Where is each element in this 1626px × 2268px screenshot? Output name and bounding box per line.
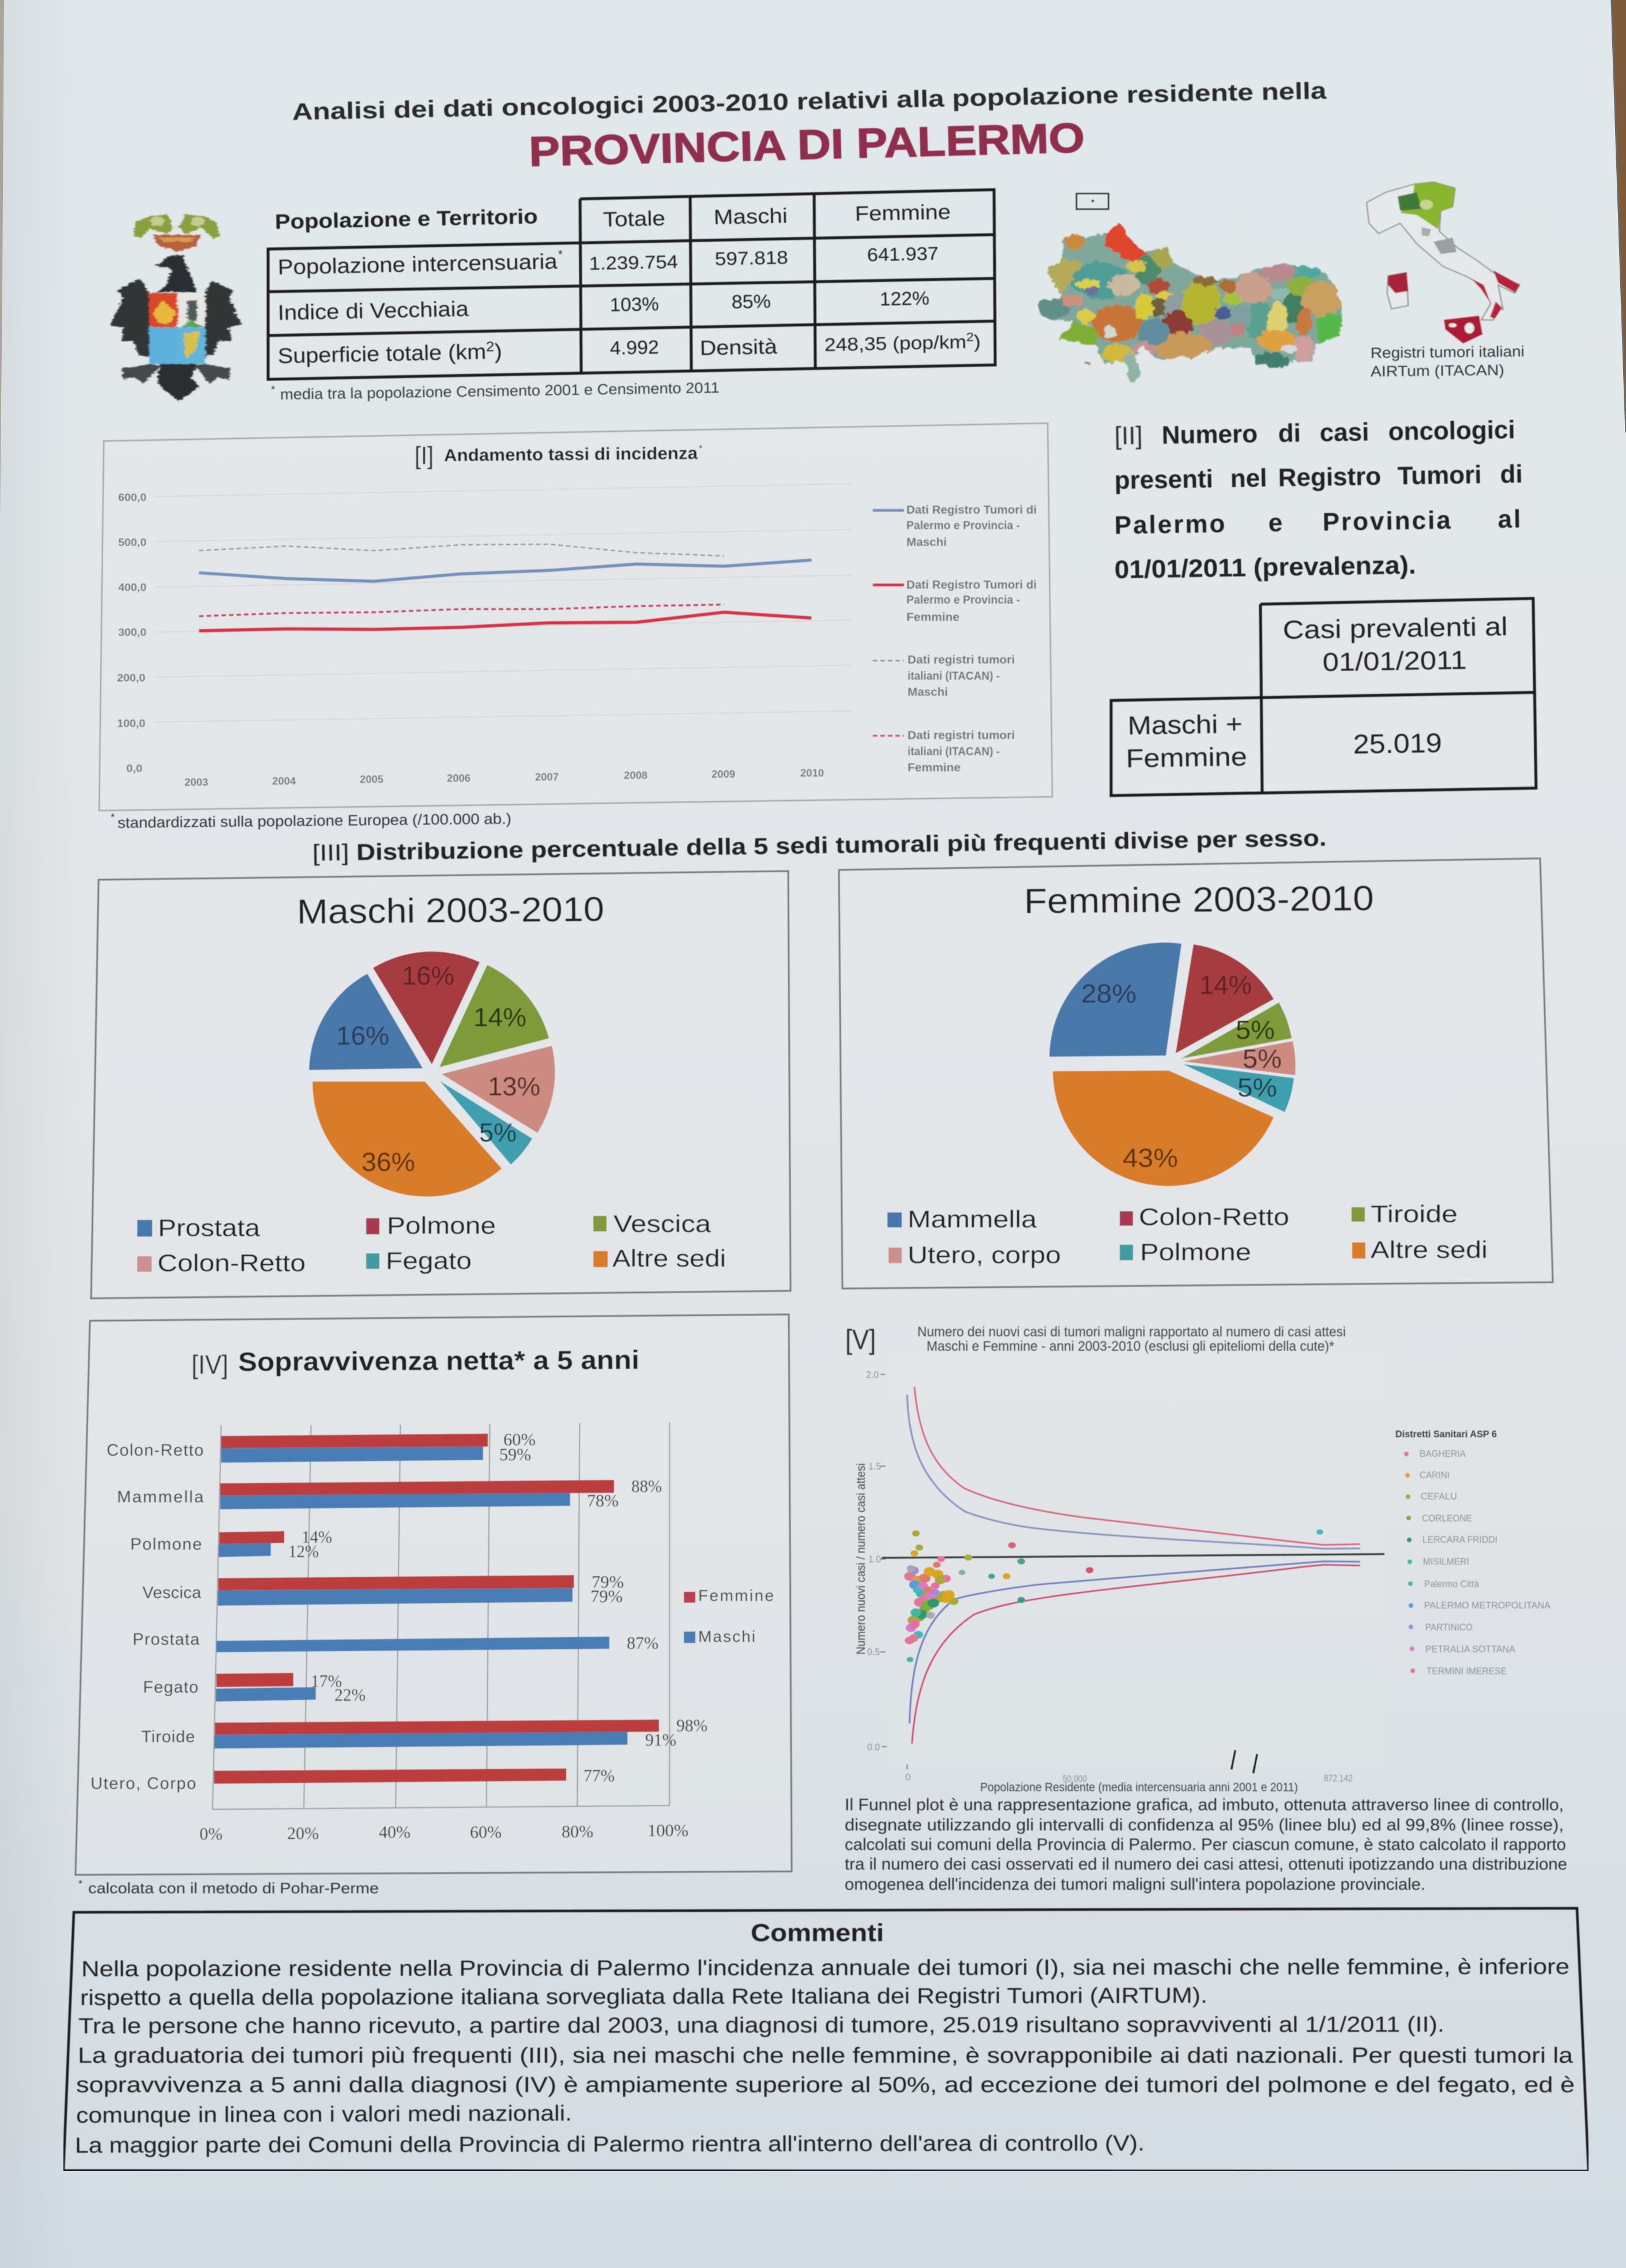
funnel legend: PETRALIA SOTTANA bbox=[1425, 1644, 1516, 1655]
chart IV legend: Femmine bbox=[698, 1587, 774, 1604]
chart I legend: Dati Registro Tumori di bbox=[906, 579, 1037, 592]
chart IV value labels: 22% bbox=[334, 1685, 366, 1705]
funnel legend: LERCARA FRIDDI bbox=[1422, 1534, 1497, 1545]
chart I y axis labels: 500,0 bbox=[118, 537, 146, 548]
header titles bbox=[292, 77, 1327, 175]
table values: Densità bbox=[699, 334, 778, 360]
panel II table: 25.019 bbox=[1353, 728, 1442, 759]
table values: 597.818 bbox=[714, 247, 788, 269]
chart I x axis labels: 2006 bbox=[447, 773, 471, 784]
chart I x axis labels: 2010 bbox=[800, 767, 824, 779]
funnel legend: CORLEONE bbox=[1422, 1513, 1472, 1524]
pie legend maschi: Fegato bbox=[386, 1247, 472, 1274]
chart I legend: Dati registri tumori bbox=[908, 654, 1015, 666]
chart IV x axis labels bbox=[200, 1820, 688, 1844]
chart I legend: Maschi bbox=[906, 536, 947, 549]
pie legend maschi: Polmone bbox=[387, 1212, 496, 1239]
funnel explanation text: disegnate utilizzando gli intervalli di confidenza al 95% (linee blu) ed al 99,8% (linee rosse), bbox=[845, 1816, 1564, 1834]
label: registri tumori italiani: Registri tumori italiani bbox=[1371, 342, 1525, 361]
table values: 103% bbox=[609, 293, 659, 315]
panel: commenti bbox=[63, 1908, 1589, 2171]
funnel explanation text: omogenea dell'incidenza dei tumori maligni sull'intera popolazione provinciale. bbox=[845, 1875, 1425, 1894]
funnel x axis labels bbox=[905, 1772, 1353, 1794]
table values: 641.937 bbox=[867, 243, 939, 265]
row and column labels: Superficie totale (km bbox=[277, 340, 472, 368]
chart I y axis labels: 300,0 bbox=[118, 627, 146, 638]
chart IV category labels: Prostata bbox=[133, 1630, 200, 1649]
row and column labels: Popolazione intercensuaria bbox=[277, 250, 558, 279]
panel II text: Provincia bbox=[1322, 506, 1452, 536]
pie labels femmine: 5% bbox=[1237, 1073, 1277, 1102]
chart IV value labels: 14% bbox=[302, 1527, 332, 1547]
pie labels maschi: 5% bbox=[479, 1118, 517, 1147]
chart IV category labels: Mammella bbox=[117, 1488, 204, 1506]
chart IV category labels: Fegato bbox=[143, 1678, 198, 1697]
row and column labels: Femmine bbox=[855, 200, 951, 225]
label: registri tumori italiani: AIRTum (ITACAN) bbox=[1371, 361, 1504, 380]
funnel legend: PALERMO METROPOLITANA bbox=[1424, 1600, 1551, 1611]
row and column labels: 2 bbox=[486, 339, 495, 355]
funnel explanation text: calcolati sui comuni della Provincia di Palermo. Per ciascun comune, è stato calcolato il rapporto bbox=[845, 1836, 1566, 1854]
chart IV category labels: Utero, Corpo bbox=[91, 1775, 196, 1793]
funnel legend: Distretti Sanitari ASP 6 bbox=[1395, 1429, 1497, 1440]
chart IV title: [IV] bbox=[191, 1350, 228, 1380]
pie legend maschi: Altre sedi bbox=[612, 1245, 726, 1272]
funnel legend bbox=[1395, 1429, 1551, 1676]
footnote: chart I: standardizzati sulla popolazione Europea (/100.000 ab.) bbox=[118, 810, 511, 831]
panel II: number of prevalent cases bbox=[1111, 416, 1536, 796]
chart I x axis labels: 2004 bbox=[272, 775, 296, 787]
funnel control curves and dots bbox=[880, 1351, 1384, 1773]
commenti body: Tra le persone che hanno ricevuto, a partire dal 2003, una diagnosi di tumore, 25.019 risultano sopravviventi al 1/1/2011 (II). bbox=[78, 2013, 1444, 2039]
pie legend femmine: Polmone bbox=[1140, 1238, 1251, 1265]
chart I legend: Femmine bbox=[908, 762, 961, 774]
chart IV x axis labels: 0% bbox=[200, 1824, 223, 1844]
chart IV x axis labels: 100% bbox=[648, 1820, 688, 1840]
pie labels femmine bbox=[1081, 970, 1282, 1173]
row and column labels: Totale bbox=[603, 206, 665, 231]
row and column labels: ) bbox=[494, 340, 502, 363]
funnel explanation text: Il Funnel plot è una rappresentazione grafica, ad imbuto, ottenuta attraverso linee di controllo, bbox=[845, 1796, 1564, 1814]
table values: 4.992 bbox=[609, 336, 659, 359]
panel V tag: [V] bbox=[845, 1325, 876, 1355]
funnel y axis labels bbox=[855, 1369, 881, 1753]
chart IV x axis labels: 80% bbox=[562, 1821, 593, 1841]
chart I legend: Dati registri tumori bbox=[908, 729, 1015, 742]
panel II text: oncologici bbox=[1388, 416, 1515, 446]
chart IV value labels: 17% bbox=[311, 1671, 342, 1691]
chart IV category labels: Tiroide bbox=[141, 1728, 195, 1746]
funnel legend: TERMINI IMERESE bbox=[1426, 1666, 1507, 1676]
pie slices femmine bbox=[1049, 943, 1296, 1186]
panel II text: [II] bbox=[1114, 421, 1143, 450]
chart IV x axis labels: 20% bbox=[287, 1823, 319, 1843]
pie legend femmine: Tiroide bbox=[1371, 1200, 1458, 1227]
chart I legend bbox=[906, 504, 1037, 774]
pie labels maschi: 13% bbox=[488, 1072, 540, 1101]
funnel plot title: Numero dei nuovi casi di tumori maligni rapportato al numero di casi attesi bbox=[917, 1324, 1346, 1340]
table values bbox=[589, 243, 981, 360]
chart IV category labels bbox=[91, 1441, 204, 1793]
funnel legend: Palermo Città bbox=[1424, 1578, 1479, 1589]
funnel legend: CARINI bbox=[1420, 1470, 1450, 1480]
chart IV category labels: Colon-Retto bbox=[107, 1441, 204, 1460]
chart I y axis labels: 0,0 bbox=[126, 763, 142, 774]
row and column labels: * bbox=[558, 248, 563, 261]
table values: 85% bbox=[731, 291, 771, 312]
pie legend maschi: Colon-Retto bbox=[157, 1249, 306, 1276]
panel II table: Maschi + bbox=[1127, 709, 1243, 740]
panel: pie chart femmine bbox=[839, 858, 1553, 1289]
pie labels maschi: 36% bbox=[362, 1147, 415, 1177]
pie legend maschi bbox=[137, 1210, 726, 1276]
panel V: funnel plot bbox=[845, 1324, 1567, 1894]
row and column labels: Indice di Vecchiaia bbox=[277, 297, 469, 325]
panel II text: presenti bbox=[1114, 465, 1213, 495]
funnel plot title: Maschi e Femmine - anni 2003-2010 (esclusi gli epiteliomi della cute)* bbox=[927, 1339, 1334, 1354]
chart I title: [I] bbox=[415, 442, 434, 470]
pie labels femmine: 28% bbox=[1081, 979, 1136, 1008]
chart I title bbox=[415, 442, 702, 470]
pie labels femmine: 5% bbox=[1243, 1044, 1282, 1073]
table values: 248,35 (pop/km bbox=[824, 331, 953, 355]
funnel x axis labels: Popolazione Residente (media intercensuaria anni 2001 e 2011) bbox=[980, 1781, 1298, 1794]
chart I title: Andamento tassi di incidenza bbox=[444, 444, 698, 465]
funnel x axis labels: 872.142 bbox=[1324, 1773, 1353, 1784]
funnel x axis labels: 50.000 bbox=[1063, 1773, 1087, 1784]
chart I x axis labels: 2008 bbox=[624, 770, 648, 781]
panel: pie chart maschi bbox=[91, 871, 791, 1298]
panel II text: casi bbox=[1319, 418, 1369, 447]
funnel explanation text bbox=[845, 1796, 1567, 1894]
panel II text: 01/01/2011 (prevalenza). bbox=[1114, 551, 1416, 584]
chart IV value labels: 91% bbox=[645, 1730, 676, 1750]
chart I plot lines bbox=[155, 484, 904, 736]
chart I x axis labels: 2007 bbox=[535, 771, 559, 783]
panel II text: al bbox=[1497, 505, 1523, 534]
chart IV legend bbox=[684, 1587, 774, 1645]
pie slices maschi bbox=[309, 951, 555, 1197]
chart I legend: Femmine bbox=[906, 611, 959, 624]
pie labels maschi: 16% bbox=[402, 961, 454, 990]
chart IV legend: Maschi bbox=[698, 1627, 755, 1645]
chart IV value labels: 79% bbox=[590, 1586, 623, 1606]
chart IV value labels: 77% bbox=[584, 1765, 615, 1785]
panel II text: Numero bbox=[1161, 420, 1258, 450]
pie labels femmine: 14% bbox=[1199, 970, 1252, 1000]
panel II text: Palermo bbox=[1114, 510, 1227, 540]
funnel y axis labels: 0.5 bbox=[867, 1647, 880, 1657]
pie legend maschi: Prostata bbox=[158, 1214, 261, 1241]
table values: 2 bbox=[966, 331, 974, 344]
funnel y axis labels: 1.5 bbox=[868, 1461, 881, 1472]
pie labels maschi bbox=[336, 961, 540, 1177]
footnote: table: * bbox=[271, 384, 275, 395]
commenti body: sopravvivenza a 5 anni dalla diagnosi (IV) è ampiamente superiore al 50%, ad eccezione dei tumori del polmone e del fegato, ed è bbox=[76, 2073, 1575, 2097]
funnel legend: PARTINICO bbox=[1425, 1622, 1473, 1633]
pie labels femmine: 43% bbox=[1123, 1143, 1178, 1173]
table values: 1.239.754 bbox=[589, 251, 678, 274]
title line 1: Analisi dei dati oncologici 2003-2010 relativi alla popolazione residente nella bbox=[292, 77, 1327, 125]
chart I legend: Palermo e Provincia - bbox=[906, 519, 1020, 532]
chart IV value labels: 12% bbox=[288, 1541, 319, 1561]
chart IV x axis labels: 40% bbox=[379, 1822, 411, 1842]
footnote: chart IV: * bbox=[78, 1878, 82, 1890]
funnel plot title bbox=[917, 1324, 1346, 1354]
chart I title: * bbox=[699, 444, 702, 454]
chart I x axis labels: 2009 bbox=[712, 768, 735, 780]
pie legend femmine: Altre sedi bbox=[1371, 1236, 1488, 1263]
chart IV value labels: 59% bbox=[499, 1444, 531, 1464]
panel II text: nel bbox=[1230, 464, 1267, 493]
panel II table: Femmine bbox=[1126, 742, 1247, 773]
pie legend femmine: Mammella bbox=[908, 1205, 1037, 1233]
chart I legend: Dati Registro Tumori di bbox=[906, 504, 1037, 517]
chart IV value labels: 60% bbox=[503, 1429, 536, 1449]
label: registri tumori italiani bbox=[1371, 342, 1525, 380]
funnel y axis labels: 0.0 bbox=[867, 1742, 880, 1753]
chart I y axis labels: 200,0 bbox=[117, 672, 145, 684]
pie legend maschi: Vescica bbox=[613, 1210, 712, 1237]
panel II table bbox=[1111, 598, 1536, 796]
chart IV grid and bars bbox=[213, 1422, 669, 1809]
pie labels maschi: 16% bbox=[336, 1021, 389, 1050]
chart I legend: italiani (ITACAN) - bbox=[908, 670, 1000, 683]
footnote: table: media tra la popolazione Censimento 2001 e Censimento 2011 bbox=[280, 379, 720, 403]
pie labels maschi: 14% bbox=[473, 1003, 526, 1032]
chart I legend: Maschi bbox=[908, 686, 948, 699]
footnote: chart I: * bbox=[111, 812, 115, 823]
panel II text: e bbox=[1268, 508, 1285, 537]
row and column labels: Popolazione e Territorio bbox=[274, 204, 538, 233]
pie legend femmine: Colon-Retto bbox=[1139, 1203, 1289, 1230]
chart IV value labels bbox=[288, 1429, 707, 1785]
chart I legend: italiani (ITACAN) - bbox=[908, 745, 1000, 758]
row and column labels bbox=[274, 200, 951, 368]
table values: 122% bbox=[879, 287, 929, 310]
funnel x axis labels: 0 bbox=[905, 1772, 910, 1783]
funnel y axis labels: 2.0 bbox=[866, 1369, 879, 1380]
chart I legend: Palermo e Provincia - bbox=[906, 594, 1020, 606]
panel II table: 01/01/2011 bbox=[1322, 645, 1467, 677]
map: province of Palermo municipalities bbox=[1023, 194, 1348, 384]
pie title femmine: Femmine 2003-2010 bbox=[1024, 879, 1374, 921]
chart I x axis labels: 2003 bbox=[185, 777, 208, 788]
panel II text bbox=[1114, 416, 1523, 584]
panel II text: Tumori bbox=[1397, 461, 1482, 490]
title line 2: PROVINCIA DI PALERMO bbox=[528, 115, 1085, 175]
funnel legend: BAGHERIA bbox=[1420, 1448, 1466, 1459]
commenti body: Nella popolazione residente nella Provincia di Palermo l'incidenza annuale dei tumori (I), sia nei maschi che nelle femmine, è inferiore bbox=[81, 1955, 1569, 1981]
footnote: chart IV: calcolata con il metodo di Pohar-Perme bbox=[88, 1879, 379, 1897]
chart IV value labels: 87% bbox=[627, 1633, 658, 1653]
panel I: line chart of incidence rates bbox=[99, 423, 1052, 811]
funnel y axis labels: 1.0 bbox=[868, 1554, 881, 1565]
panel II text: di bbox=[1278, 419, 1301, 448]
chart IV value labels: 78% bbox=[587, 1490, 619, 1510]
chart IV category labels: Vescica bbox=[142, 1584, 202, 1602]
pie legend femmine: Utero, corpo bbox=[908, 1241, 1061, 1268]
pie legend femmine bbox=[887, 1200, 1488, 1268]
chart IV category labels: Polmone bbox=[130, 1535, 202, 1554]
chart IV title: Sopravvivenza netta* a 5 anni bbox=[238, 1344, 639, 1377]
table: popolazione e territorio bbox=[268, 190, 995, 379]
chart I y axis labels: 400,0 bbox=[118, 582, 146, 593]
chart I y axis labels: 100,0 bbox=[117, 718, 145, 729]
icon: coat of arms of the province bbox=[108, 214, 240, 401]
pie labels femmine: 5% bbox=[1236, 1015, 1275, 1045]
commenti body bbox=[75, 1955, 1575, 2158]
chart IV value labels: 79% bbox=[592, 1572, 624, 1592]
commenti body: rispetto a quella della popolazione italiana sorvegliata dalla Rete Italiana dei Registri Tumori (AIRTUM). bbox=[80, 1984, 1207, 2010]
table values: ) bbox=[974, 331, 981, 352]
funnel explanation text: tra il numero dei casi osservati ed il numero dei casi attesi, ottenuti ipotizzando una distribuzione bbox=[845, 1855, 1567, 1874]
chart IV value labels: 88% bbox=[631, 1476, 662, 1496]
funnel legend: MISILMERI bbox=[1423, 1556, 1469, 1567]
chart I x axis labels: 2005 bbox=[360, 774, 383, 785]
commenti heading: Commenti bbox=[751, 1919, 884, 1947]
commenti body: comunque in linea con i valori medi nazionali. bbox=[76, 2101, 572, 2128]
funnel legend: CEFALU bbox=[1421, 1491, 1457, 1502]
row and column labels: Maschi bbox=[713, 204, 788, 229]
chart IV x axis labels: 60% bbox=[470, 1822, 502, 1842]
chart I x axis labels bbox=[185, 767, 824, 788]
funnel y axis labels: Numero nuovi casi / numero casi attesi bbox=[855, 1463, 868, 1655]
pie title maschi: Maschi 2003-2010 bbox=[297, 890, 604, 931]
heading III: distribution by sex: [III] Distribuzione percentuale della 5 sedi tumorali più frequenti divise per sesso. bbox=[312, 826, 1327, 866]
commenti body: La graduatoria dei tumori più frequenti (III), sia nei maschi che nelle femmine, è sovrapponibile ai dati nazionali. Per questi tumori la bbox=[78, 2044, 1574, 2068]
panel II table: Casi prevalenti al bbox=[1282, 612, 1508, 645]
map: Italian cancer registries bbox=[1367, 182, 1519, 344]
panel II text: di bbox=[1500, 460, 1523, 488]
chart I y axis labels bbox=[117, 492, 146, 774]
chart IV value labels: 98% bbox=[676, 1715, 707, 1735]
panel II text: Registro bbox=[1278, 462, 1382, 492]
chart I y axis labels: 600,0 bbox=[118, 492, 146, 503]
panel IV: bar chart of net survival bbox=[76, 1314, 792, 1875]
commenti body: La maggior parte dei Comuni della Provincia di Palermo rientra all'interno dell'area di controllo (V). bbox=[75, 2131, 1145, 2158]
